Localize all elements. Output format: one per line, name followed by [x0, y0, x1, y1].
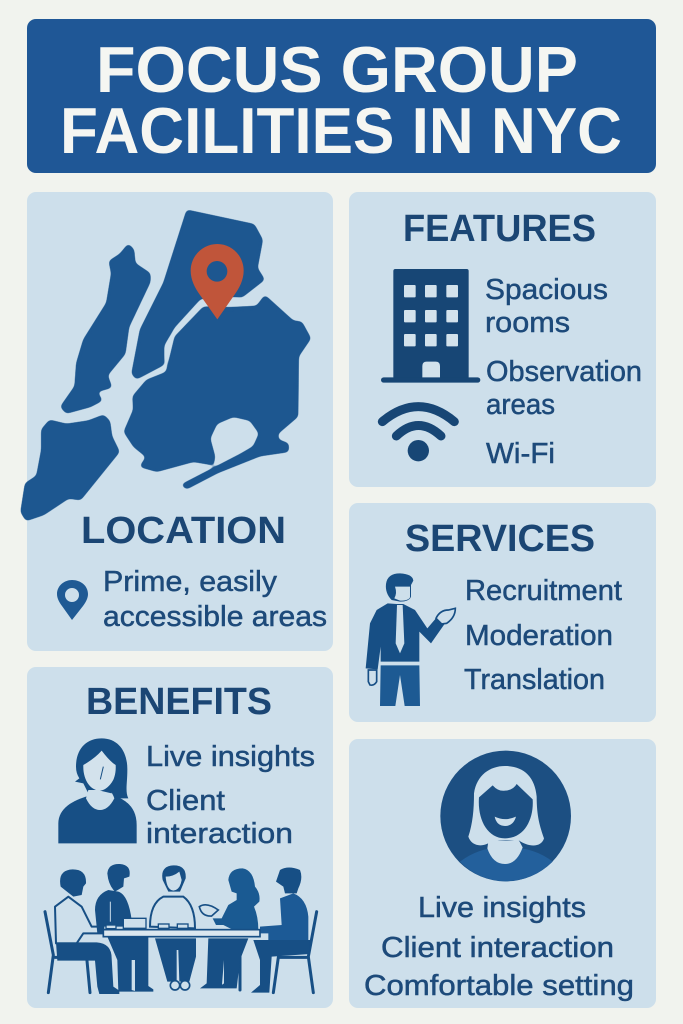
icon: smiling woman in circle: [440, 751, 571, 881]
text: services list: Moderation: [465, 620, 613, 652]
text: client insights list: Client interaction: [381, 932, 614, 964]
person 3: [150, 865, 196, 990]
table: [103, 924, 260, 937]
text: benefits list: [146, 741, 315, 850]
icon: woman: [58, 738, 137, 843]
title banner: FOCUS GROUP: [96, 33, 578, 106]
text: client insights list: Comfortable setting: [364, 970, 634, 1002]
text: location description: [103, 566, 327, 633]
icon: chairs: [45, 912, 317, 993]
text: client insights list: Live insights: [418, 892, 586, 924]
text: services list: Translation: [464, 664, 605, 696]
panel: location: [22, 192, 333, 651]
icon: NYC borough map with pin: [22, 211, 309, 519]
illustration: group around a table: [45, 864, 317, 994]
text: features list: Wi-Fi: [486, 438, 555, 470]
heading: benefits: BENEFITS: [86, 681, 272, 723]
title banner: [27, 19, 656, 173]
text: features list: areas: [486, 389, 555, 421]
text: services list: Recruitment: [465, 575, 622, 607]
icon: small pin: [57, 580, 88, 620]
text: services list: [464, 575, 622, 696]
heading: features: FEATURES: [403, 208, 596, 250]
text: benefits list: Client: [146, 785, 225, 817]
title banner: FACILITIES IN NYC: [60, 94, 622, 167]
text: features list: rooms: [485, 307, 570, 339]
panel: services: [349, 503, 656, 722]
panel: client insights: [349, 739, 656, 1008]
heading: location: LOCATION: [81, 510, 286, 552]
heading: services: SERVICES: [405, 518, 595, 560]
icon: location pin: [191, 244, 244, 319]
text: benefits list: interaction: [146, 818, 293, 850]
text: location description: Prime, easily: [103, 566, 278, 598]
icon: wifi: [382, 407, 454, 461]
person 5: [251, 867, 310, 993]
person 4: [199, 868, 260, 988]
text: location description: accessible areas: [103, 601, 327, 633]
panel: benefits: [27, 667, 333, 1008]
text: features list: Spacious: [485, 274, 608, 306]
text: benefits list: Live insights: [146, 741, 315, 773]
icon: building: [381, 269, 480, 383]
panel: features: [349, 192, 656, 487]
text: features list: Observation: [486, 356, 642, 388]
person 2: [95, 864, 153, 992]
person 1: [55, 869, 119, 994]
text: client insights list: [364, 892, 634, 1002]
text: features list: [485, 274, 642, 470]
icon: presenter: [366, 573, 455, 706]
